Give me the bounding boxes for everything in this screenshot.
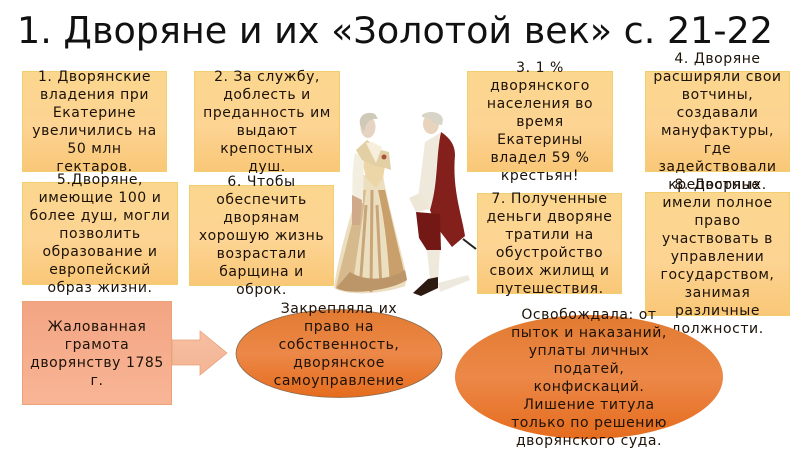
text: box 2: крепостных — [220, 141, 314, 157]
text: box 3: населения во — [487, 96, 593, 112]
text: box 1: гектаров. — [56, 159, 133, 175]
text: box 6: барщина и — [219, 264, 304, 280]
text: box 2: доблесть и — [223, 87, 311, 103]
text: charter of 1785: дворянству 1785 — [30, 355, 164, 371]
text: box 4: вотчины, — [682, 87, 753, 103]
text: box 8: участвовать в — [662, 231, 773, 247]
text: freedoms — [511, 307, 667, 449]
text: freedoms: Освобождала: от — [521, 307, 657, 323]
text: box 4: задействовали — [658, 159, 777, 175]
text: box 8: управлении — [671, 249, 764, 265]
panel: box 6 background — [189, 185, 334, 286]
panel: box 2 background — [194, 71, 340, 172]
panel: box 4 background — [645, 71, 790, 172]
text: box 5: имеющие 100 и — [39, 190, 161, 206]
text: box 7: тратили на — [505, 227, 594, 243]
text: freedoms: только по решению — [511, 415, 667, 431]
text: box 4: крепостных. — [668, 177, 767, 193]
text: freedoms: Лишение титула — [523, 397, 655, 413]
text: freedoms: дворянского суда. — [516, 433, 662, 449]
text: freedoms: податей, — [554, 361, 624, 377]
panel: box 8 background — [645, 192, 790, 316]
panel: box 7 background — [477, 193, 622, 294]
text: box 8: 8. Дворяне — [674, 177, 761, 193]
text: box 3: дворянского — [490, 78, 590, 94]
text: box 5: образ жизни. — [47, 280, 153, 296]
text: box 5 — [30, 172, 170, 296]
text: box 8: различные — [675, 303, 760, 319]
text: box 4: создавали — [677, 105, 758, 121]
text: box 8: занимая — [685, 285, 750, 301]
text: box 5: более душ, могли — [30, 208, 170, 224]
text: box 3 — [487, 60, 593, 184]
text: freedoms: уплаты личных — [529, 343, 649, 359]
text: box 1: 1. Дворянские — [38, 69, 151, 85]
text: box 4 — [653, 51, 782, 193]
text: box 5: 5.Дворяне, — [57, 172, 143, 188]
panel: box 1 background — [22, 71, 167, 172]
text: box 1: Екатерине — [53, 105, 136, 121]
text: box 1: увеличились на — [32, 123, 157, 139]
text: box 7 — [487, 191, 612, 297]
text: box 8 — [661, 177, 774, 337]
text: box 8: должности. — [671, 321, 764, 337]
text: box 4: расширяли свои — [653, 69, 782, 85]
text: box 3: 3. 1 % — [516, 60, 564, 76]
text: box 4: 4. Дворяне — [674, 51, 761, 67]
text: property rights: самоуправление — [274, 373, 404, 389]
text: box 3: владел 59 % — [490, 150, 590, 166]
text: box 2: преданность им — [203, 105, 331, 121]
panel: box 5 background — [22, 182, 178, 285]
text: box 6: обеспечить — [216, 192, 307, 208]
text: box 1: 50 млн — [67, 141, 122, 157]
text: box 7: своих жилищ и — [490, 263, 610, 279]
text: charter of 1785: г. — [91, 373, 103, 389]
text: box 2: выдают — [237, 123, 297, 139]
text: box 5: европейский — [49, 262, 151, 278]
text: box 1 — [32, 69, 157, 175]
text: box 6: оброк. — [236, 282, 287, 298]
text: charter of 1785 — [30, 319, 164, 389]
text: box 8: государством, — [661, 267, 774, 283]
text: charter of 1785: Жалованная — [48, 319, 146, 335]
text: property rights: право на — [304, 319, 374, 335]
text: box 3: Екатерины — [497, 132, 583, 148]
text: box 5: образование и — [42, 244, 158, 260]
text: box 6: возрастали — [217, 246, 306, 262]
text: box 4: мануфактуры, — [661, 123, 774, 139]
text: box 2: 2. За службу, — [214, 69, 320, 85]
text: box 4: где — [704, 141, 731, 157]
text: box 3: время — [516, 114, 564, 130]
text: box 7: обустройство — [496, 245, 603, 261]
text: charter of 1785: грамота — [65, 337, 129, 353]
text: box 7: деньги дворяне — [487, 209, 612, 225]
text: box 6: 6. Чтобы — [227, 174, 296, 190]
text: property rights: собственность, — [279, 337, 399, 353]
text: box 5: позволить — [59, 226, 141, 242]
text: property rights: дворянское — [293, 355, 385, 371]
text: freedoms: пыток и наказаний, — [511, 325, 667, 341]
text: box 1: владения при — [40, 87, 149, 103]
text: box 8: право — [694, 213, 741, 229]
text: box 6: дворянам — [223, 210, 300, 226]
text: box 3: крестьян! — [501, 168, 579, 184]
text: property rights — [274, 301, 404, 389]
text: box 2 — [203, 69, 331, 175]
panel: box 3 background — [467, 71, 613, 172]
text: freedoms: конфискаций. — [534, 379, 644, 395]
text: box 7: путешествия. — [495, 281, 604, 297]
box: charter of 1785 — [22, 301, 172, 405]
text: box 2: душ. — [248, 159, 286, 175]
text: box 8: имели полное — [662, 195, 773, 211]
title: 1. Дворяне и их «Золотой век» с. 21-22 — [17, 9, 773, 52]
text: box 7: 7. Полученные — [491, 191, 608, 207]
text: box 6: хорошую жизнь — [199, 228, 324, 244]
text: property rights: Закрепляла их — [281, 301, 397, 317]
text: box 6 — [199, 174, 324, 298]
